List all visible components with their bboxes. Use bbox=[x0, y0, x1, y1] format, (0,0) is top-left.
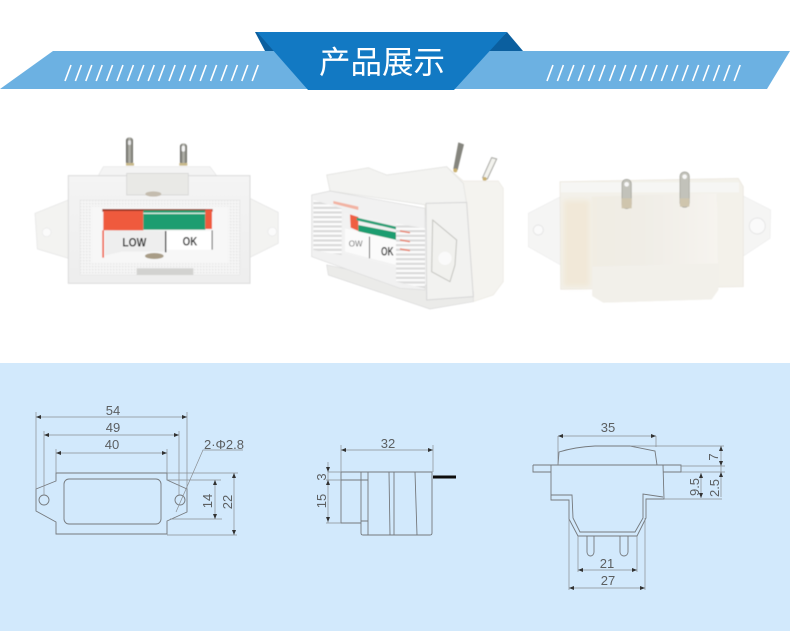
ribbed lens bbox=[312, 191, 425, 290]
dimension 32: 32 bbox=[381, 436, 395, 451]
clear strip bbox=[561, 182, 739, 192]
drawing: front dimensions bbox=[36, 403, 244, 535]
left ribbon band bbox=[0, 51, 308, 89]
center block bbox=[592, 193, 718, 303]
bezel window bbox=[80, 200, 240, 275]
photo: front view of meter bbox=[35, 137, 278, 283]
photo: angled view of meter bbox=[312, 142, 503, 309]
left mounting wing bbox=[35, 200, 68, 258]
dimension 40: 40 bbox=[105, 437, 119, 452]
label OK: OK bbox=[183, 235, 197, 249]
drawing: top dimensions bbox=[533, 420, 725, 590]
left hatch marks bbox=[65, 65, 258, 81]
bottom shadow bbox=[137, 268, 193, 275]
dimension 21: 21 bbox=[600, 556, 614, 571]
lens ribs bbox=[313, 200, 342, 255]
terminal pin bbox=[433, 476, 456, 478]
side clear block bbox=[426, 202, 473, 300]
top bump bbox=[127, 173, 188, 195]
terminals bbox=[453, 142, 497, 181]
side mounting tab bbox=[432, 220, 457, 282]
body outline bbox=[341, 472, 432, 535]
inner clear bbox=[92, 207, 228, 263]
dial face bbox=[333, 201, 397, 268]
clear body bbox=[68, 176, 250, 283]
dimension 49: 49 bbox=[106, 420, 120, 435]
bottom lip bbox=[327, 265, 473, 309]
window bbox=[64, 479, 161, 524]
mounting holes bbox=[42, 227, 277, 237]
red streaks on ribs bbox=[400, 231, 410, 251]
terminals bbox=[622, 172, 689, 209]
dimension 7: 7 bbox=[706, 453, 721, 461]
rear housing bbox=[560, 178, 743, 289]
dimension 27: 27 bbox=[601, 573, 615, 588]
right hatch marks bbox=[547, 65, 740, 81]
terminal pins bbox=[126, 137, 187, 166]
label LOW: LOW bbox=[122, 235, 147, 249]
center ribbon bbox=[257, 32, 507, 90]
white nylon rear bbox=[423, 167, 503, 302]
mounting holes bbox=[39, 495, 185, 505]
center block lower shade bbox=[592, 263, 718, 303]
left fold bbox=[255, 32, 275, 51]
clear top shell bbox=[327, 167, 467, 205]
panel: dimension drawings background bbox=[0, 363, 790, 631]
dimension 14: 14 bbox=[200, 494, 215, 508]
left mounting wing bbox=[528, 197, 561, 265]
dial face bbox=[102, 209, 213, 258]
dimension 2.5: 2.5 bbox=[707, 479, 722, 497]
cream side shade bbox=[563, 200, 590, 287]
rear collar bbox=[98, 167, 217, 176]
right ribbon band bbox=[454, 51, 790, 89]
dimension 35: 35 bbox=[601, 420, 615, 435]
header banner bbox=[0, 32, 790, 90]
right fold bbox=[488, 32, 523, 51]
title: 产品展示 bbox=[319, 44, 445, 80]
needle pivots bbox=[145, 191, 164, 259]
outline bbox=[36, 473, 187, 534]
right mounting wing bbox=[743, 196, 771, 256]
dimension hole diameter: 2·Φ2.8 bbox=[204, 437, 244, 452]
dimension 15: 15 bbox=[314, 494, 329, 508]
dimension 3: 3 bbox=[314, 473, 329, 481]
photo: rear view of meter bbox=[528, 172, 771, 303]
drawing: side dimensions bbox=[314, 436, 456, 535]
dimension 54: 54 bbox=[106, 403, 120, 418]
label OK: OK bbox=[381, 245, 394, 259]
right ribs over dial bbox=[396, 223, 425, 288]
mounting holes bbox=[533, 218, 765, 235]
dimension 22: 22 bbox=[220, 495, 235, 509]
housing outline bbox=[533, 446, 681, 536]
dimension 9.5: 9.5 bbox=[687, 478, 702, 496]
label LOW: OW bbox=[349, 240, 363, 249]
right mounting wing bbox=[250, 198, 278, 257]
terminal pins bbox=[587, 536, 628, 556]
